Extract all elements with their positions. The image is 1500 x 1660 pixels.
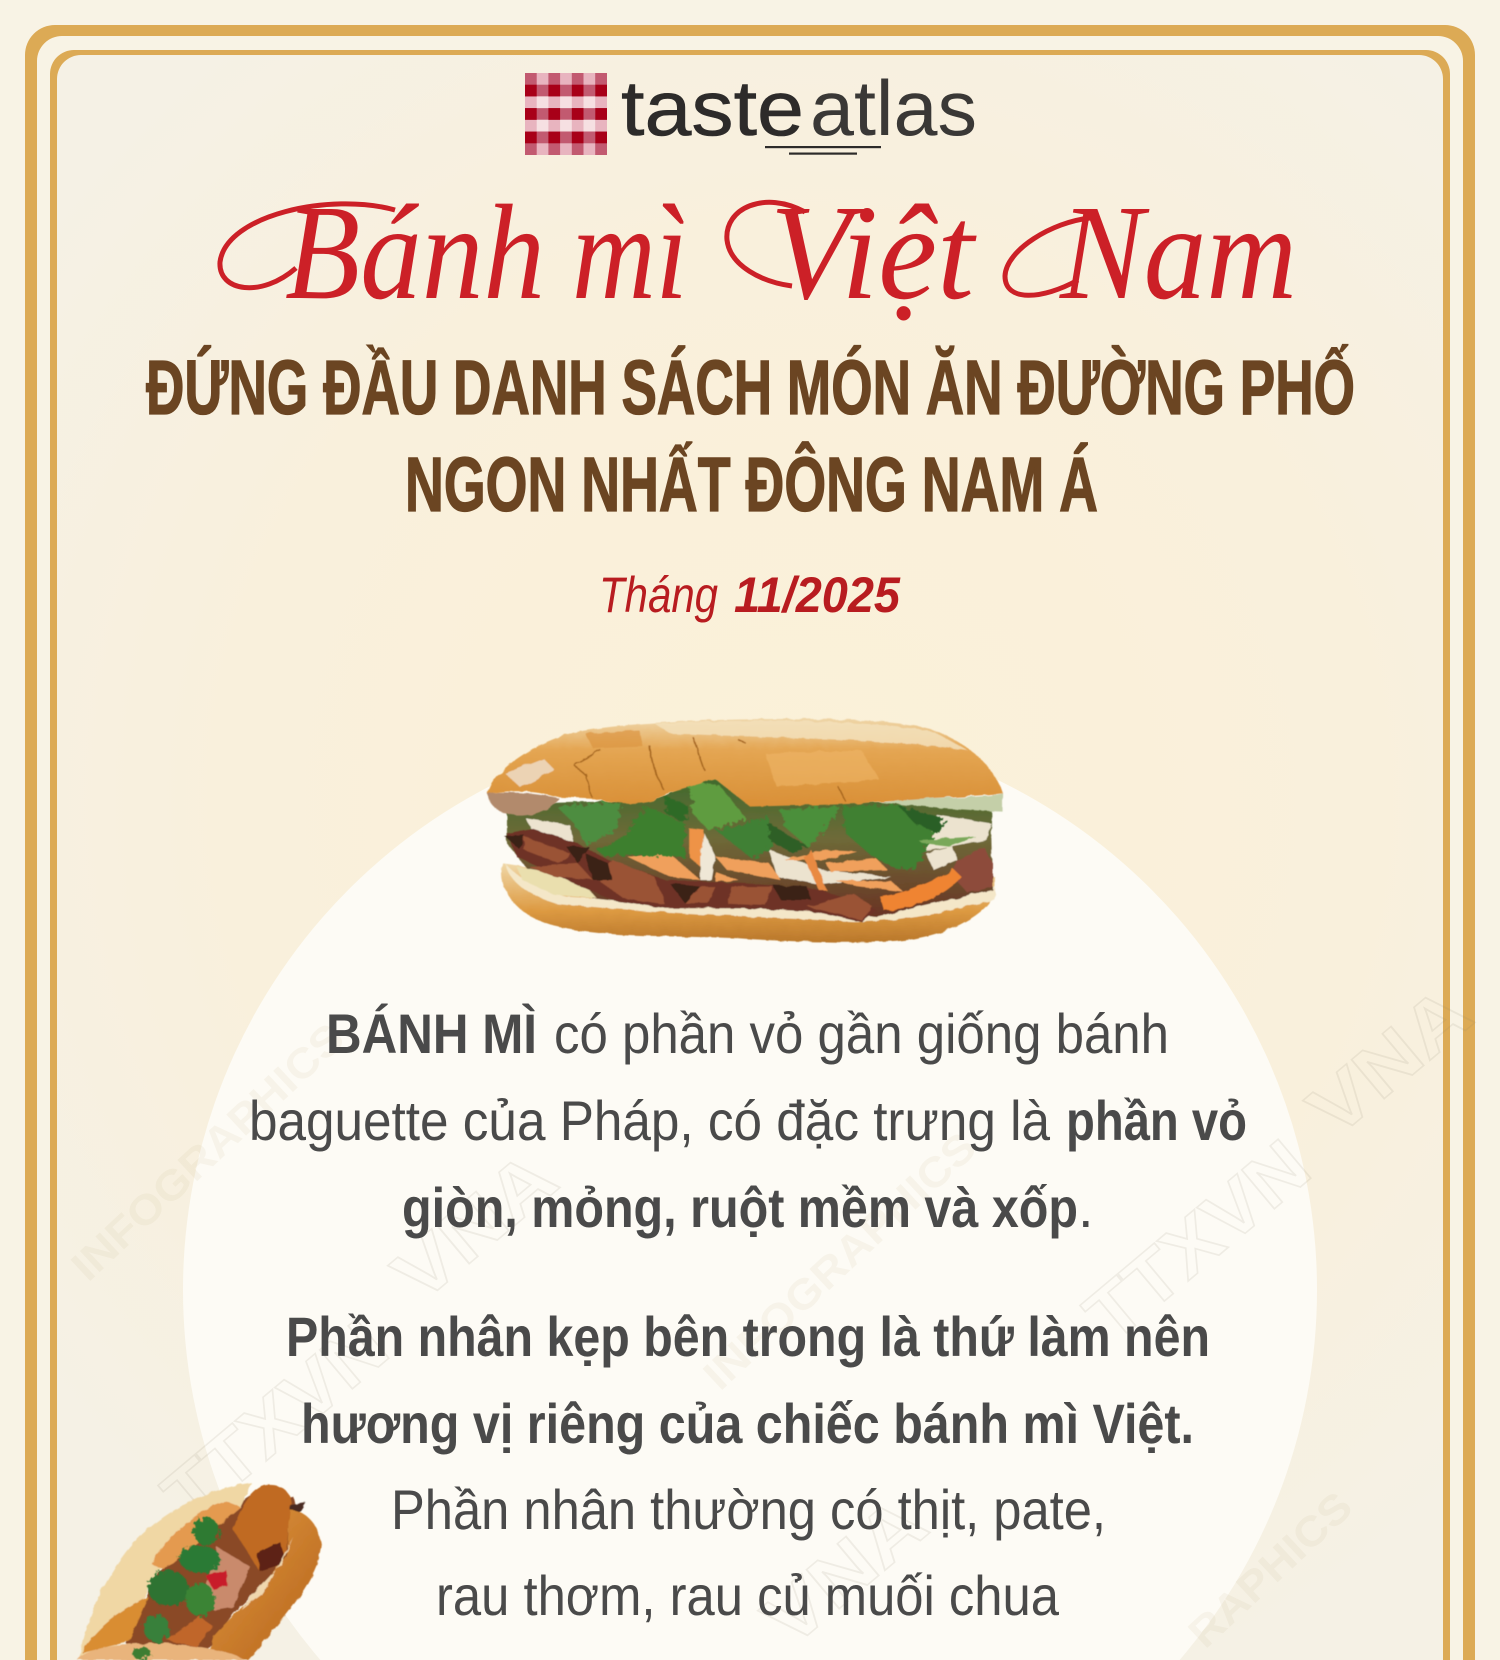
paragraph 1: BÁNH MÌ	[326, 1002, 537, 1065]
body text	[249, 1002, 1247, 1627]
carrot strips	[628, 828, 961, 910]
watermarks: INFOGRAPHICS	[62, 1014, 353, 1290]
top bread crust	[488, 719, 1003, 807]
icon: checkered tablecloth	[525, 73, 607, 155]
pickled radish layer	[526, 815, 991, 885]
chili	[205, 1571, 227, 1589]
title: Bánh mì Việt Nam: Nam	[1059, 178, 1297, 328]
image: bánh mì sandwich, top	[488, 719, 1003, 942]
herbs	[557, 780, 945, 870]
date: 11/2025	[734, 567, 901, 623]
paragraph 1: phần vỏ	[1066, 1089, 1247, 1152]
top bread underside	[488, 792, 559, 816]
date: Tháng	[599, 567, 718, 623]
logo underlines	[765, 146, 881, 155]
right bread	[207, 1510, 322, 1660]
watermarks	[62, 970, 1487, 1660]
date	[599, 567, 901, 623]
heading	[146, 344, 1355, 528]
grilled sausage	[233, 1485, 291, 1572]
bottom bread	[502, 863, 995, 942]
watermarks: TTXVN	[147, 1303, 403, 1537]
pale mayo on crumb	[517, 867, 597, 898]
left bread	[80, 1483, 252, 1657]
second sandwich	[77, 1643, 245, 1660]
watermarks: INFOGRAPHICS	[694, 1123, 985, 1399]
paragraph 2: Phần nhân kẹp bên trong là thứ làm nên	[286, 1305, 1210, 1368]
paragraph 1: có phần vỏ gần giống bánh	[554, 1002, 1169, 1065]
paragraph 1: giòn, mỏng, ruột mềm và xốp	[402, 1176, 1078, 1239]
paragraph 1: .	[1078, 1176, 1094, 1239]
heading: NGON NHẤT ĐÔNG NAM Á	[405, 440, 1098, 528]
title: Bánh mì Việt Nam	[220, 178, 1297, 328]
paragraph 2: rau thơm, rau củ muối chua	[436, 1564, 1060, 1627]
title: Bánh mì Việt Nam: Bánh	[285, 178, 545, 328]
grilled meat	[505, 828, 993, 922]
watermarks: TTXVN	[1069, 1123, 1325, 1357]
paragraph 2: hương vị riêng của chiếc bánh mì Việt.	[301, 1392, 1194, 1455]
paragraph 1	[249, 1002, 1247, 1239]
image: bánh mì sandwich, lower left	[77, 1483, 322, 1660]
paragraph 1: baguette của Pháp, có đặc trưng là	[249, 1089, 1051, 1152]
watermarks: VNA	[1292, 970, 1487, 1152]
title: Bánh mì Việt Nam: Việt	[770, 178, 977, 328]
paragraph 2: Phần nhân thường có thịt, pate,	[391, 1478, 1106, 1541]
bread crumb rim	[505, 863, 995, 922]
logo: tasteatlas	[525, 64, 977, 155]
watermarks: VNA	[377, 1135, 572, 1317]
watermarks: RAPHICS	[1179, 1482, 1361, 1657]
watermarks: VNA	[747, 1480, 942, 1660]
wordmark: atlas: atlas	[810, 64, 977, 152]
wordmark: taste: taste	[621, 64, 804, 152]
panel: white circle	[183, 723, 1317, 1660]
filling backing	[507, 773, 993, 917]
paragraph 2	[286, 1305, 1210, 1627]
title: Bánh mì Việt Nam: mì	[572, 178, 688, 328]
herbs	[132, 1518, 221, 1659]
pink meat	[207, 1547, 250, 1610]
filling	[127, 1493, 300, 1660]
